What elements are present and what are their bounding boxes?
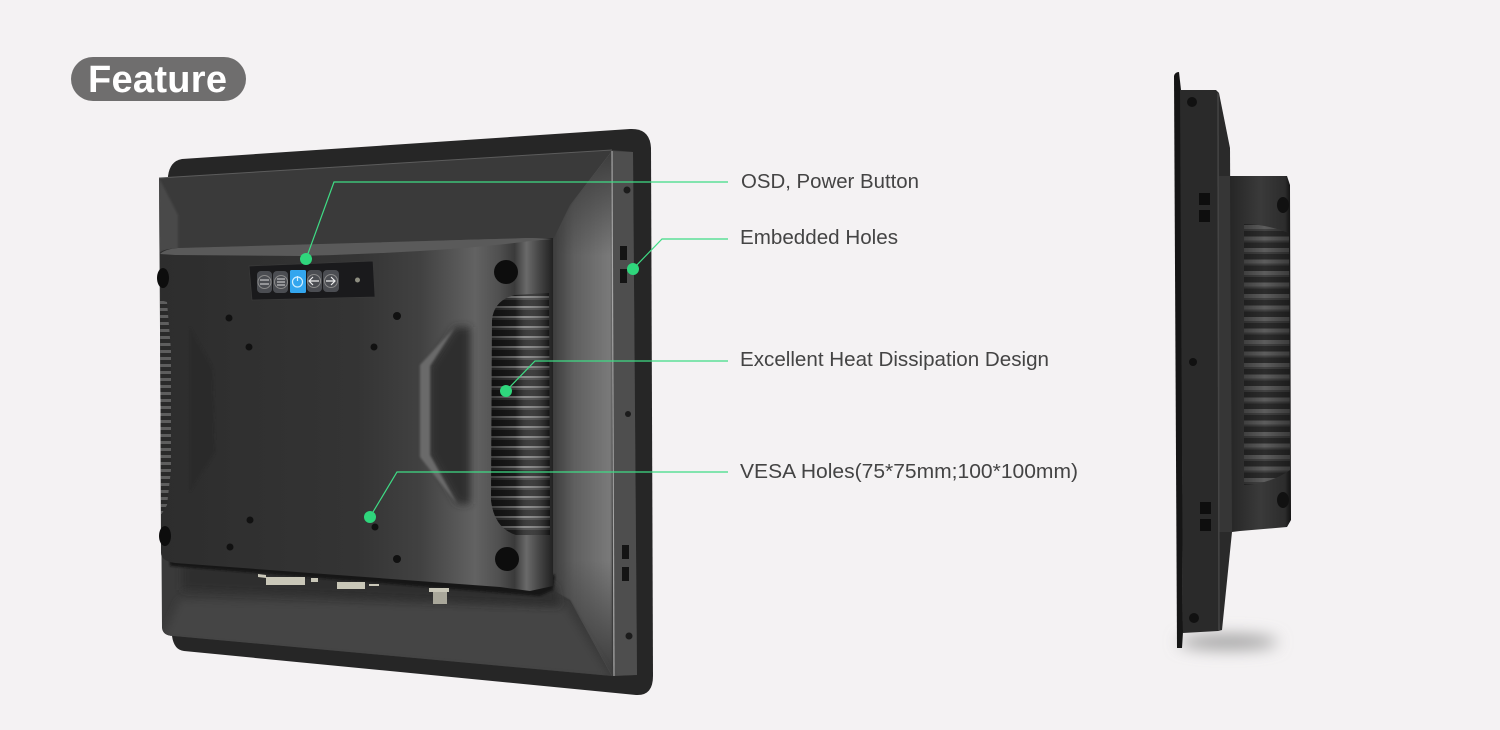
VESA holes: [226, 312, 401, 563]
housing right bevel: [557, 152, 612, 676]
mounting plate: [160, 238, 553, 591]
heat dissipation fins left: [160, 300, 171, 515]
housing right side strip: [612, 151, 637, 676]
housing under-plate recess: [183, 568, 558, 607]
callout lines and dots: [300, 182, 728, 523]
side rear block: [1230, 176, 1291, 532]
callout: VESA Holes: [364, 472, 728, 523]
side housing: [1180, 90, 1232, 633]
callout: Embedded Holes: [627, 239, 728, 275]
plate right recess: [430, 327, 470, 504]
button: left: [307, 270, 322, 292]
button: power: [290, 270, 306, 293]
callout: Heat Dissipation: [500, 361, 728, 397]
floor shadow: [1178, 635, 1278, 649]
plate top lip: [160, 238, 552, 256]
button: right: [323, 270, 339, 292]
label: Embedded Holes: Embedded Holes: [740, 227, 898, 249]
rear housing: [159, 150, 637, 676]
button: menu: [273, 271, 288, 293]
side heat fins: [1244, 224, 1290, 485]
large mounting holes: [157, 260, 519, 571]
indicator light: [355, 278, 360, 282]
monitor side view: [1174, 72, 1291, 649]
title: Feature: Feature: [88, 59, 227, 101]
side housing strip: [1219, 176, 1232, 532]
side bezel: [1174, 72, 1183, 648]
connectors: [258, 574, 449, 604]
plate right recess bevel: [420, 327, 457, 504]
housing bottom bevel: [162, 600, 612, 680]
side embedded holes: [1199, 193, 1211, 531]
label: VESA Holes: VESA Holes(75*75mm;100*100mm): [740, 461, 1078, 483]
label: Excellent Heat Dissipation Design: Excellent Heat Dissipation Design: [740, 349, 1049, 371]
button: swap: [257, 271, 272, 293]
bezel screws: [624, 186, 632, 640]
monitor rear view: [157, 129, 653, 695]
label: OSD, Power Button: OSD, Power Button: [741, 171, 919, 193]
housing edge highlight: [612, 151, 614, 676]
callout: OSD, Power Button: [300, 182, 728, 265]
embedded holes: [620, 246, 629, 581]
side housing highlight: [1218, 93, 1219, 630]
side screws: [1187, 97, 1289, 623]
front bezel: [168, 129, 653, 695]
OSD panel: [249, 261, 375, 300]
housing top edge highlight: [159, 150, 612, 178]
housing left bevel: [158, 178, 178, 252]
heat dissipation fins right: [491, 293, 550, 535]
plate left recess: [190, 327, 215, 492]
mounting plate shadow: [170, 550, 555, 596]
